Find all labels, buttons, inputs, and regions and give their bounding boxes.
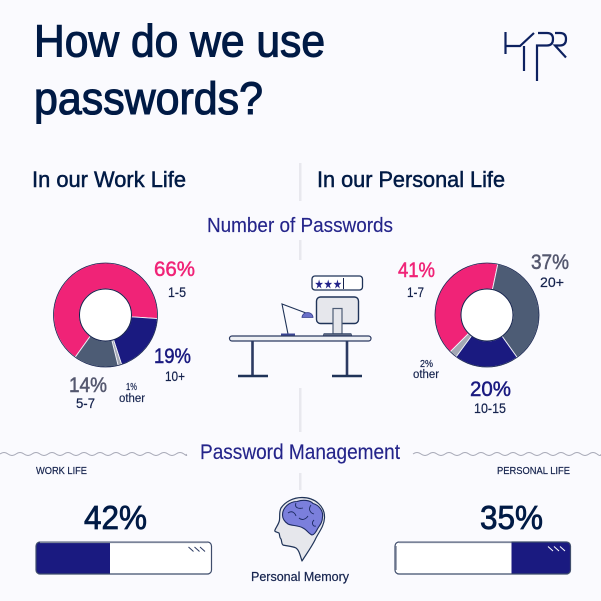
logo: HYPR — [506, 32, 566, 81]
progress bar: work life — [36, 542, 212, 574]
desk — [230, 336, 371, 376]
personal life labels: other — [413, 369, 439, 381]
work life labels: other — [119, 393, 145, 405]
title: How do we use — [34, 16, 325, 66]
personal life labels: 1-7 — [407, 284, 424, 300]
title: passwords? — [34, 73, 263, 124]
work life labels: 14% — [69, 374, 107, 397]
work life labels: 1% — [126, 381, 137, 393]
donut chart: work life — [54, 263, 158, 367]
illustration: desk with computer — [230, 276, 371, 376]
heading: work life: In our Work Life — [32, 167, 186, 192]
label: work life: WORK LIFE — [36, 465, 87, 477]
heading: password management: Password Management — [200, 441, 400, 464]
heading: personal life: In our Personal Life — [317, 167, 505, 192]
personal life labels: 2% — [420, 358, 433, 370]
icon: head with brain — [275, 498, 325, 561]
donut chart: personal life — [435, 263, 539, 367]
password box — [312, 276, 362, 292]
work life labels: 66% — [154, 258, 195, 281]
personal life labels: 20% — [470, 378, 511, 401]
label: personal memory: Personal Memory — [251, 569, 349, 584]
work life labels: 19% — [154, 345, 191, 368]
monitor — [316, 297, 358, 336]
title — [34, 16, 325, 124]
personal life labels: 20+ — [540, 274, 564, 290]
password box: ★★★ — [314, 276, 342, 292]
personal life labels: 10-15 — [474, 400, 506, 416]
progress bar: personal life — [395, 542, 570, 574]
work life labels: 10+ — [165, 368, 185, 384]
work life labels: 1-5 — [168, 284, 186, 300]
stat: 42%: 42% — [84, 499, 147, 536]
desk lamp — [281, 304, 313, 336]
personal life labels: 41% — [398, 259, 435, 282]
stat: 35%: 35% — [480, 499, 543, 536]
work life labels — [69, 258, 195, 411]
personal life labels: 37% — [531, 251, 569, 274]
personal life labels — [398, 251, 569, 416]
heading: number of passwords: Number of Passwords — [207, 215, 393, 237]
work life labels: 5-7 — [76, 395, 95, 411]
label: personal life: PERSONAL LIFE — [497, 465, 570, 477]
